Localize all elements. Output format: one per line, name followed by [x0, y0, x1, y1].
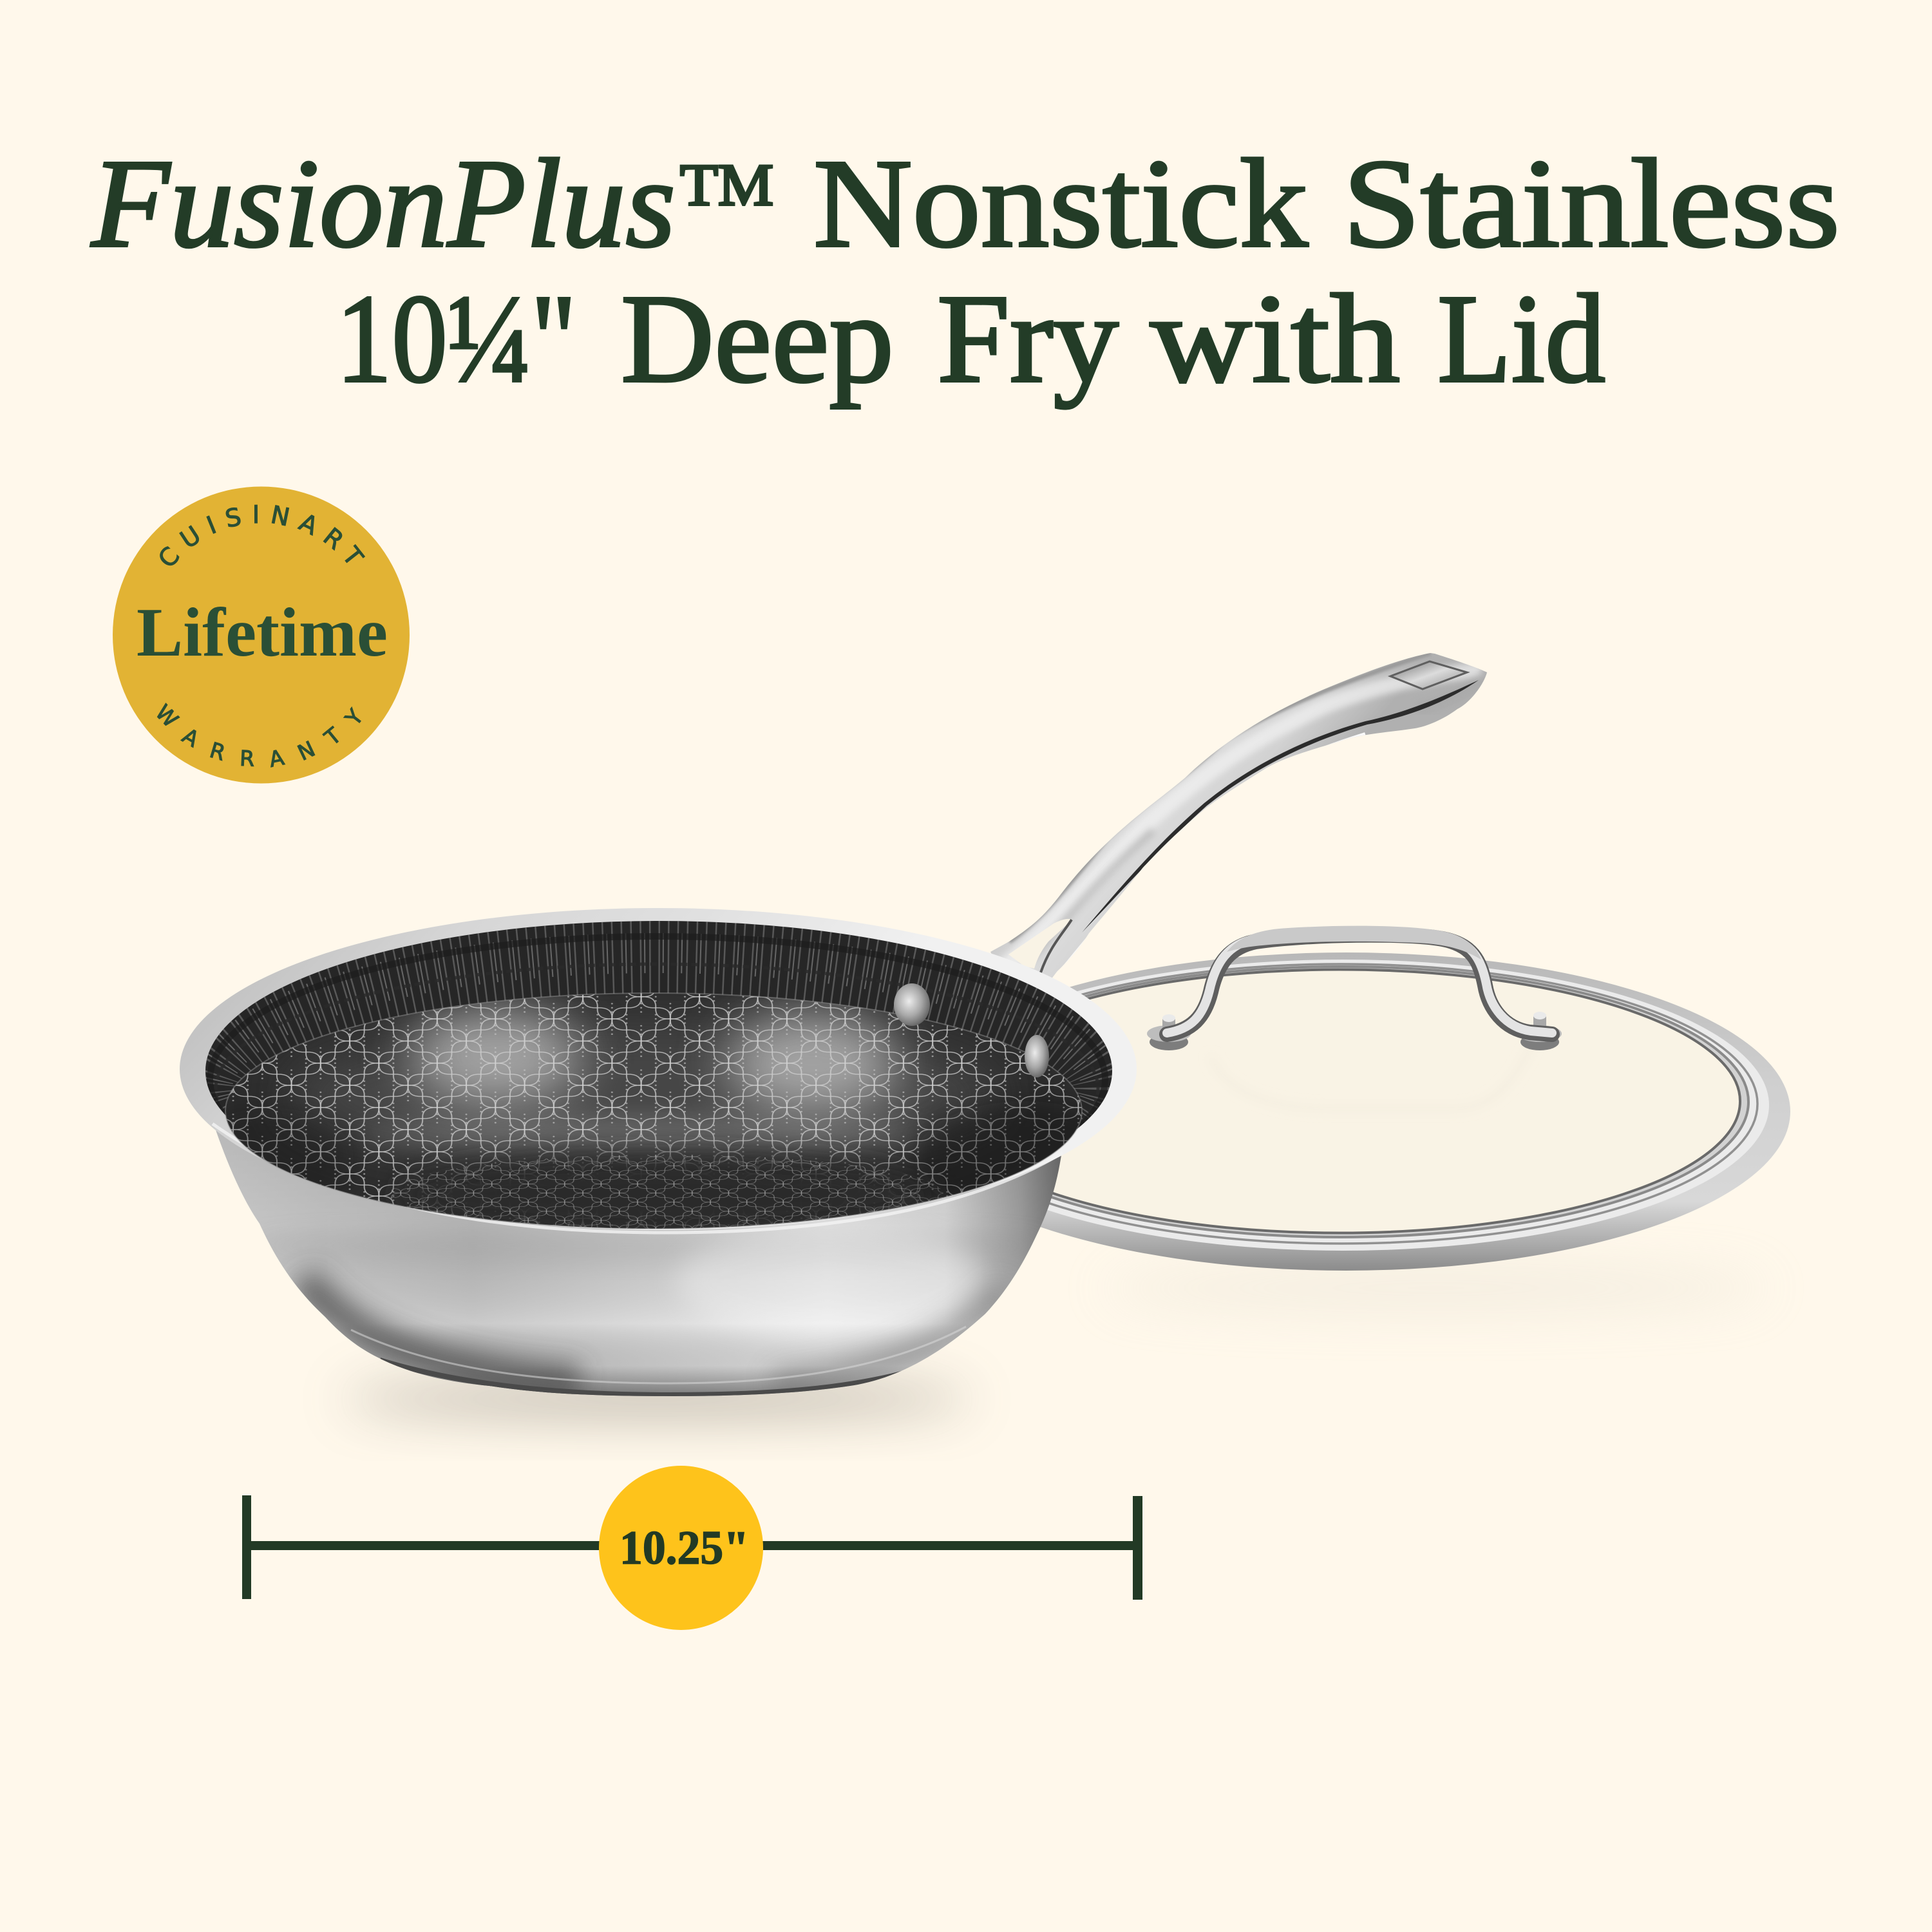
- title: FusionPlus: [90, 133, 676, 274]
- size circle: [599, 1466, 763, 1630]
- rivet: right: [1025, 1035, 1049, 1077]
- pan: [180, 908, 1137, 1404]
- size label: 10.25": [620, 1522, 749, 1575]
- title: with: [1150, 268, 1400, 409]
- handle slot: [1009, 919, 1072, 969]
- badge: Cuisinart lifetime warranty: Lifetime: [137, 594, 388, 671]
- lid rim bright band: [916, 960, 1769, 1251]
- badge: Cuisinart lifetime warranty: [113, 487, 410, 783]
- lid handle: [1147, 926, 1562, 1050]
- title: Fry: [937, 268, 1119, 409]
- pan interior: [187, 921, 1133, 1236]
- floor edge: [225, 993, 1082, 1229]
- strap edge: [1041, 920, 1072, 972]
- title: [90, 133, 1840, 409]
- title: Stainless: [1343, 133, 1840, 274]
- left rivet post: [1147, 1014, 1191, 1050]
- glass pane: [939, 970, 1740, 1233]
- pan rim: [180, 908, 1137, 1230]
- infographic canvas: [89, 156, 1837, 1630]
- left tick: [242, 1495, 251, 1599]
- interior floor: [225, 993, 1082, 1229]
- right tick: [1133, 1496, 1142, 1600]
- pan body: [216, 1130, 1061, 1396]
- horizontal bar: [242, 1541, 1142, 1550]
- lid rim inner band: [933, 967, 1748, 1237]
- badge: Cuisinart lifetime warranty: WARRANTY: [157, 703, 361, 768]
- handle reflections: [1005, 653, 1484, 969]
- title: Lid: [1437, 268, 1605, 409]
- glass lid: [902, 952, 1790, 1271]
- pan handle: [990, 653, 1487, 985]
- handle dark reflection line: [1082, 680, 1479, 933]
- rivet: left: [894, 983, 930, 1026]
- title: 10¼": [336, 268, 576, 409]
- title: Deep: [621, 268, 894, 409]
- rim lower highlight: [213, 1124, 1063, 1233]
- size measurement line: [242, 1466, 1142, 1630]
- badge: Cuisinart lifetime warranty: CUISINART: [160, 505, 366, 565]
- arched grip: [1167, 933, 1552, 1034]
- handle hanging hole: [1390, 661, 1467, 689]
- lid rim outer band: [902, 952, 1790, 1271]
- glass reflection: [1211, 1043, 1533, 1109]
- right rivet post: [1518, 1012, 1562, 1050]
- lid rim groove: [925, 964, 1757, 1244]
- interior wall texture: [205, 921, 1112, 1130]
- pan shadow: [341, 1383, 972, 1414]
- title: TM: [680, 152, 773, 218]
- lid shadow: [1101, 1266, 1771, 1310]
- top strap: [1227, 926, 1481, 960]
- title: Nonstick: [813, 133, 1309, 274]
